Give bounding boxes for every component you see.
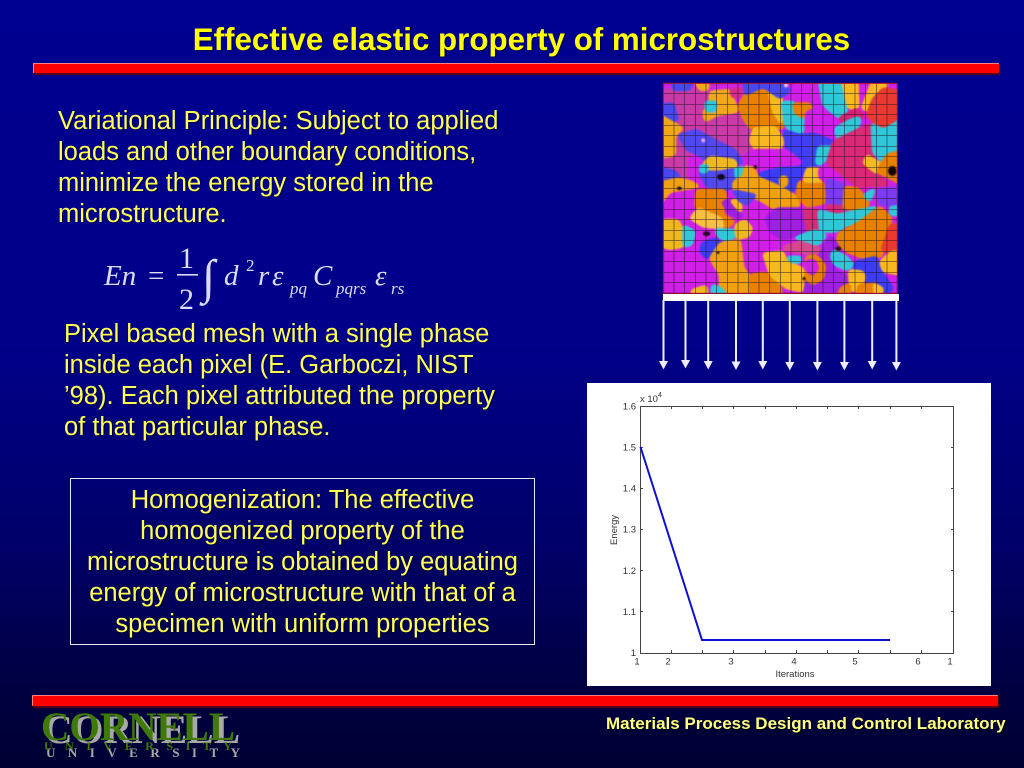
axis titles: 4 (658, 392, 662, 399)
energy equation: ∫ (199, 251, 218, 306)
y axis labels (623, 402, 636, 659)
Cornell University logo: UNIVERSITY (46, 745, 241, 760)
arrow 5 (758, 300, 767, 370)
arrow 7 (813, 300, 822, 370)
energy equation: 1 (179, 242, 194, 275)
axis titles: Iterations (775, 669, 815, 680)
y axis labels: 1.1 (623, 607, 636, 618)
x axis labels: 1 (634, 656, 640, 668)
white load plate (663, 294, 899, 301)
energy equation: En (103, 260, 136, 292)
bottom red divider bar (32, 695, 998, 706)
footer: lab name: Materials Process Design and Control Laboratory (606, 714, 1006, 733)
text block: pixel based mesh (64, 320, 496, 442)
x axis labels: 2 (665, 656, 671, 668)
y axis labels: 1.3 (623, 524, 636, 536)
arrow 4 (732, 300, 740, 370)
x axis labels: 1 (947, 656, 953, 668)
text block: pixel based mesh: ’98). Each pixel attributed the property (64, 382, 495, 410)
energy equation: d (224, 260, 239, 292)
energy equation: ε (272, 260, 284, 292)
x axis labels: 3 (728, 656, 734, 668)
load arrows (659, 300, 901, 370)
energy curve (640, 447, 890, 640)
text block: variational principle: Variational Principle: Subject to applied (58, 107, 498, 135)
arrow 9 (868, 300, 877, 370)
y axis labels: 1.2 (623, 566, 636, 577)
axis titles (609, 392, 815, 680)
text block: variational principle: microstructure. (58, 200, 227, 228)
Cornell University logo: CORNELL (41, 705, 235, 749)
arrow 10 (892, 300, 901, 370)
callout: homogenization: specimen with uniform properties (115, 610, 490, 638)
callout: homogenization: homogenized property of the (140, 517, 465, 545)
text block: pixel based mesh: Pixel based mesh with a single phase (64, 320, 489, 348)
text block: pixel based mesh: inside each pixel (E. Garboczi, NIST (64, 351, 474, 379)
callout: homogenization: Homogenization: The effective (131, 486, 474, 514)
energy equation: C (313, 260, 333, 292)
energy equation: pqrs (335, 279, 367, 298)
Cornell University logo: UNIVERSITY (44, 739, 232, 753)
energy equation: = (148, 260, 164, 292)
top red divider bar (33, 63, 999, 73)
microstructure pixel mesh image (662, 82, 898, 294)
y axis labels: 1.6 (623, 402, 636, 412)
x axis labels: 5 (852, 656, 858, 668)
y axis labels: 1 (631, 648, 636, 659)
energy equation (103, 242, 405, 315)
x axis labels: 4 (791, 656, 797, 668)
title: Effective elastic property of microstructures (193, 22, 850, 57)
arrow 6 (785, 300, 794, 370)
callout: homogenization: microstructure is obtained by equating (87, 548, 518, 576)
text block: variational principle: loads and other boundary conditions, (58, 138, 476, 166)
energy equation: pq (289, 279, 308, 298)
text block: pixel based mesh: of that particular phase. (64, 413, 330, 441)
y axis labels: 1.5 (623, 442, 636, 454)
energy equation: 2 (246, 256, 254, 275)
axis titles: Energy (609, 515, 620, 545)
x axis labels: 6 (915, 656, 921, 668)
arrow 2 (681, 300, 690, 368)
text block: variational principle (58, 107, 498, 228)
energy equation: ε (375, 260, 387, 292)
arrow 1 (659, 300, 668, 370)
y axis labels: 1.4 (623, 484, 636, 494)
axis titles: x 10 (640, 394, 658, 405)
arrow 3 (704, 300, 713, 370)
energy equation: r (258, 260, 270, 292)
x axis labels (634, 656, 953, 668)
callout: homogenization (70, 478, 535, 645)
callout: homogenization: energy of microstructure with that of a (89, 579, 516, 607)
arrow 8 (840, 300, 849, 370)
Cornell University logo: CORNELL (44, 707, 240, 752)
line chart: energy vs iterations (587, 383, 991, 686)
text block: variational principle: minimize the energy stored in the (58, 169, 434, 197)
energy equation: rs (391, 279, 405, 298)
